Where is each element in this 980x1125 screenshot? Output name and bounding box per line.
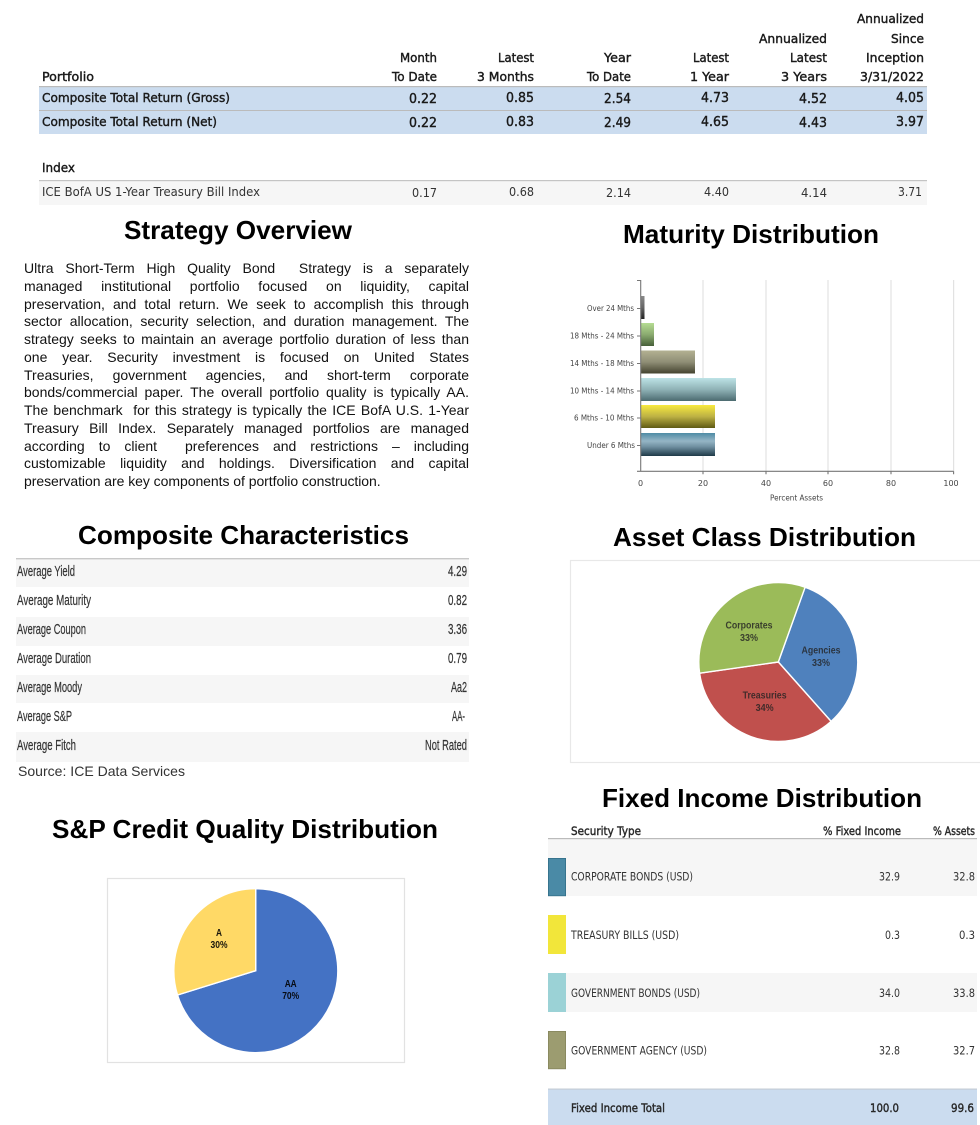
axis values (638, 479, 959, 488)
row: composite total return net: Composite Total Return (Net) (42, 115, 217, 129)
text block: strategy overview: Ultra Short-Term High Quality Bond Strategy is a separately (24, 260, 469, 276)
table column headers: To Date (391, 70, 437, 84)
total row: Fixed Income Total (571, 1101, 665, 1115)
row: ICE BofA index: ICE BofA US 1-Year Treasury Bill Index (42, 185, 260, 199)
row: composite total return gross: 4.73 (701, 91, 729, 106)
slice labels: Corporates (726, 620, 773, 632)
total row (571, 1101, 974, 1115)
axis title: Percent Assets (770, 494, 823, 502)
slice labels: 70% (282, 991, 299, 1002)
table column headers: To Date (586, 70, 631, 84)
table column headers: Annualized (759, 32, 827, 46)
row: ICE BofA index: 2.14 (606, 186, 631, 200)
text block: strategy overview: managed institutional portfolio focused on liquidity, capital (24, 278, 469, 294)
slice labels: 34% (756, 703, 774, 714)
security rows: GOVERNMENT BONDS (USD) (571, 986, 700, 1000)
table column headers: Latest (790, 51, 827, 65)
table column headers: Annualized (857, 12, 924, 26)
pie chart: asset class distribution (570, 560, 980, 762)
text block: strategy overview: sector allocation, security selection, and duration management. The (24, 313, 469, 329)
security rows: 32.8 (879, 1044, 900, 1058)
table header (571, 824, 975, 838)
heading: composite characteristics: Composite Characteristics (78, 520, 409, 550)
category labels: 6 Mths - 10 Mths (574, 414, 634, 422)
security rows: 34.0 (879, 986, 900, 1000)
security rows: TREASURY BILLS (USD) (570, 928, 679, 942)
table: composite characteristics: Average Yield (17, 563, 75, 580)
security rows: CORPORATE BONDS (USD) (571, 870, 693, 884)
axis values: 80 (886, 479, 896, 488)
table: composite characteristics: Average S&P (17, 708, 72, 725)
index heading: Index (42, 161, 75, 175)
text block: strategy overview: according to client preferences and restrictions – including (24, 438, 469, 454)
performance table (39, 12, 927, 205)
row: composite total return gross: 4.05 (896, 91, 924, 106)
slice labels (726, 620, 841, 714)
category labels: Under 6 Mths (587, 441, 635, 450)
pie chart: S&P credit quality (108, 878, 404, 1062)
table column headers: 3 Months (477, 70, 534, 84)
table header: Security Type (571, 824, 641, 838)
security rows: 32.8 (953, 870, 975, 884)
table: composite characteristics (16, 558, 469, 762)
bars (641, 296, 736, 456)
heading: S&P credit quality distribution: S&P Credit Quality Distribution (52, 814, 438, 844)
table: composite characteristics: 0.79 (448, 650, 467, 667)
text block: strategy overview: Treasuries, government agencies, and short-term corporate (24, 366, 469, 382)
row: composite total return gross: 4.52 (799, 92, 827, 107)
row: ICE BofA index: 4.14 (801, 186, 827, 200)
table column headers: Inception (866, 51, 924, 65)
table column headers: Portfolio (42, 70, 94, 84)
text block: strategy overview: preservation, and total return. We seek to accomplish this through (24, 296, 469, 312)
heading: maturity distribution: Maturity Distribution (623, 219, 879, 249)
row: composite total return net: 0.22 (409, 116, 437, 131)
table: composite characteristics: 4.29 (448, 563, 467, 580)
total row: 100.0 (870, 1101, 899, 1115)
table column headers (42, 12, 924, 84)
row: ICE BofA index: 3.71 (898, 185, 922, 199)
table: composite characteristics: Average Coupon (17, 621, 86, 638)
table column headers: 3 Years (781, 70, 827, 84)
slice labels: A (216, 928, 222, 939)
colour swatches (548, 858, 566, 1069)
table: composite characteristics: Average Duration (17, 650, 91, 667)
category labels (570, 304, 635, 450)
table: composite characteristics: Not Rated (425, 737, 467, 754)
table: composite characteristics: AA- (452, 708, 465, 725)
slice labels: Treasuries (743, 690, 787, 702)
bar chart: maturity distribution (570, 280, 959, 502)
table column headers: Latest (693, 51, 729, 65)
row: ICE BofA index: 0.17 (412, 186, 437, 200)
security rows: 32.7 (953, 1044, 975, 1058)
row: ICE BofA index: 4.40 (704, 185, 729, 199)
source note: Source: ICE Data Services (18, 763, 185, 779)
table: composite characteristics: 0.82 (448, 592, 467, 609)
row: composite total return net: 2.49 (604, 116, 631, 131)
category labels: 18 Mths - 24 Mths (570, 332, 634, 340)
axis values: 60 (823, 479, 833, 488)
table column headers: Year (603, 51, 631, 65)
security rows: 33.8 (953, 986, 975, 1000)
table column headers: Month (400, 51, 437, 65)
table: composite characteristics: Average Moody (17, 679, 82, 696)
row: ICE BofA index (42, 185, 922, 200)
axis values: 20 (698, 479, 708, 488)
slice labels: 33% (740, 633, 758, 644)
slice labels: 33% (812, 658, 830, 669)
heading: fixed income distribution: Fixed Income Distribution (602, 783, 922, 813)
row: composite total return net (42, 115, 924, 131)
text block: strategy overview: strategy seeks to maintain an average portfolio duration of less than (24, 331, 469, 347)
axis values: 100 (943, 479, 959, 488)
table column headers: Latest (498, 51, 534, 65)
table header: % Fixed Income (823, 824, 901, 838)
row: composite total return gross: 0.22 (409, 92, 437, 107)
heading: strategy overview: Strategy Overview (124, 215, 353, 245)
security rows: 32.9 (879, 870, 900, 884)
category labels: 10 Mths - 14 Mths (570, 386, 634, 396)
security rows (570, 870, 975, 1058)
row: composite total return gross: 2.54 (604, 92, 631, 107)
slice labels: 30% (210, 940, 228, 951)
category labels: Over 24 Mths (587, 304, 634, 313)
text block: strategy overview: one year. Security investment is focused on United States (24, 349, 469, 365)
security rows: GOVERNMENT AGENCY (USD) (571, 1044, 707, 1058)
axis values: 40 (761, 479, 771, 488)
row: composite total return gross (42, 91, 924, 107)
security rows: 0.3 (959, 928, 975, 942)
total row: 99.6 (951, 1101, 974, 1115)
table: composite characteristics: Average Maturity (17, 592, 91, 609)
axis values: 0 (638, 479, 643, 488)
table column headers: Since (891, 32, 924, 46)
table: fixed income distribution (548, 824, 977, 1125)
text block: strategy overview: The benchmark for this strategy is typically the ICE BofA U.S. 1-Year (24, 402, 469, 418)
slice labels: AA (285, 979, 297, 990)
row: composite total return gross: Composite Total Return (Gross) (42, 91, 230, 105)
table: composite characteristics: 3.36 (448, 621, 467, 638)
row: composite total return net: 3.97 (896, 115, 924, 130)
table column headers: 3/31/2022 (860, 70, 924, 84)
slice labels: Agencies (802, 646, 841, 656)
category labels: 14 Mths - 18 Mths (570, 359, 634, 368)
row: ICE BofA index: 0.68 (509, 185, 534, 199)
row: composite total return net: 4.43 (799, 116, 827, 131)
heading: asset class distribution: Asset Class Distribution (613, 522, 916, 552)
text block: strategy overview: preservation are key components of portfolio construction. (24, 473, 381, 489)
text block: strategy overview: bonds/commercial paper. The overall portfolio quality is typically AA. (24, 384, 469, 400)
text block: strategy overview: Treasury Bill Index. Separately managed portfolios are managed (24, 420, 469, 436)
row: composite total return gross: 0.85 (506, 91, 534, 106)
security rows: 0.3 (885, 928, 900, 942)
text block: strategy overview (24, 260, 469, 489)
row: composite total return net: 0.83 (506, 115, 534, 130)
text block: strategy overview: customizable liquidity and holdings. Diversification and capital (24, 455, 469, 471)
slice labels (210, 928, 299, 1002)
table column headers: 1 Year (690, 70, 729, 84)
row: composite total return net: 4.65 (701, 115, 729, 130)
table: composite characteristics: Average Fitch (17, 737, 76, 754)
table: composite characteristics: Aa2 (451, 679, 467, 696)
